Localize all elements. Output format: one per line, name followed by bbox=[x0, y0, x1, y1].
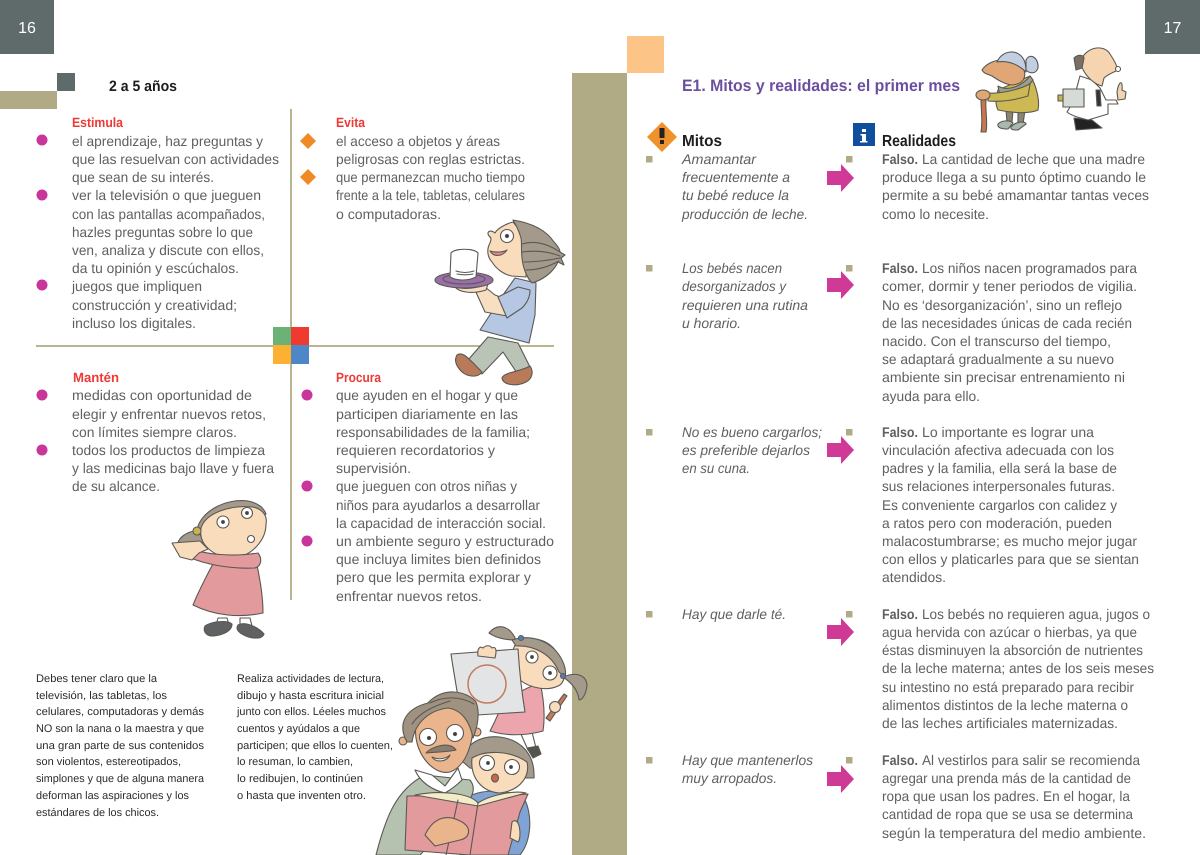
right pigtail bbox=[563, 674, 587, 700]
reality 4: de la leche materna; antes de los seis meses bbox=[882, 660, 1154, 676]
bullets bbox=[36, 134, 48, 290]
hand bbox=[976, 90, 990, 100]
list text: que las resuelvan con actividades bbox=[72, 151, 279, 167]
bullets bbox=[302, 390, 312, 546]
shirt bbox=[480, 278, 536, 343]
reality 4: agua hervida con azúcar o hierbas, ya que bbox=[882, 624, 1137, 640]
reality 5: agregar una prenda más de la cantidad de bbox=[882, 770, 1131, 786]
father head bbox=[415, 695, 473, 772]
illustration: grandmother bbox=[976, 52, 1039, 132]
illustration: father reading with children bbox=[376, 627, 587, 855]
reality 3: a ratos pero con moderación, pueden bbox=[882, 515, 1112, 531]
sleeve bbox=[498, 287, 530, 318]
list text: con límites siempre claros. bbox=[72, 424, 237, 440]
list text bbox=[71, 133, 279, 331]
page number 16: 16 bbox=[18, 20, 36, 37]
myths text bbox=[681, 151, 822, 786]
panel: evita bbox=[300, 115, 525, 222]
column heading: mitos: Mitos bbox=[682, 133, 722, 150]
list text: incluso los digitales. bbox=[72, 315, 196, 331]
list text: peligrosas con reglas estrictas. bbox=[336, 151, 525, 167]
pencil and hand bbox=[546, 694, 567, 721]
ponytail bbox=[178, 530, 206, 548]
note: pantallas: Debes tener claro que la bbox=[36, 673, 158, 685]
note: pantallas: NO son la nana o la maestra y que bbox=[36, 723, 204, 735]
reality 2: comer, dormir y tener periodos de vigilia. bbox=[882, 278, 1137, 294]
list text bbox=[336, 133, 525, 222]
illustration: girl in pink dress bbox=[172, 501, 266, 638]
father torso bbox=[376, 775, 473, 855]
list text: y las medicinas bajo llave y fuera bbox=[72, 460, 274, 476]
reality 1: produce llega a su punto óptimo cuando le bbox=[882, 169, 1146, 185]
reality 5: ropa que usan los padres. En el hogar, la bbox=[882, 788, 1130, 804]
list text: juegos que impliquen bbox=[71, 278, 202, 294]
pink arrows bbox=[827, 164, 854, 793]
reality 3 bbox=[882, 424, 1139, 585]
myths text: producción de leche. bbox=[681, 206, 808, 222]
glass bbox=[450, 249, 478, 280]
reality 5 bbox=[882, 752, 1146, 841]
note: pantallas: deforman las aspiraciones y los bbox=[36, 790, 189, 802]
diamond bullets bbox=[300, 133, 316, 185]
note: pantallas bbox=[36, 673, 205, 819]
bullets bbox=[36, 390, 48, 456]
reality 3: Falso. bbox=[882, 424, 918, 440]
list text: con las pantallas acompañados, bbox=[72, 206, 265, 222]
olive central column bbox=[572, 73, 627, 855]
list text: un ambiente seguro y estructurado bbox=[336, 533, 554, 549]
small square bullets bbox=[646, 156, 852, 764]
myths text: Los bebés nacen bbox=[682, 260, 782, 276]
coat bbox=[1067, 76, 1118, 120]
illustration: doctor bbox=[1058, 48, 1126, 130]
reality 3: vinculación afectiva adecuada con los bbox=[882, 442, 1114, 458]
boy shirt bbox=[460, 791, 530, 855]
list text: supervisión. bbox=[336, 460, 411, 476]
reality 3: padres y la familia, ella será la base de bbox=[882, 460, 1117, 476]
dress bbox=[193, 560, 263, 616]
heading: estimula: Estimula bbox=[72, 115, 123, 130]
boy head bbox=[472, 752, 528, 793]
reality 5: Al vestirlos para salir se recomienda bbox=[922, 752, 1140, 768]
myths text: No es bueno cargarlos; bbox=[682, 424, 822, 440]
heading: 2 a 5 años: 2 a 5 años bbox=[109, 78, 177, 95]
myths text: muy arropados. bbox=[682, 770, 777, 786]
ears bbox=[473, 728, 481, 736]
hair bbox=[1074, 55, 1084, 70]
boy hair bbox=[463, 737, 534, 778]
myths text: desorganizados y bbox=[682, 278, 787, 294]
list text: da tu opinión y escúchalos. bbox=[72, 260, 239, 276]
myths text: frecuentemente a bbox=[682, 169, 790, 185]
socks bbox=[216, 618, 229, 625]
note: lectura: cuentos y ayúdalos a que bbox=[237, 723, 360, 735]
list text: ver la televisión o que jueguen bbox=[72, 187, 261, 203]
girl hair bbox=[512, 638, 566, 677]
page number 17: 17 bbox=[1164, 20, 1182, 37]
list text: ven, analiza y discute con ellos, bbox=[72, 242, 264, 258]
peach square bbox=[627, 36, 664, 73]
father hand bbox=[425, 818, 469, 846]
note: lectura: lo resuman, lo cambien, bbox=[237, 756, 353, 768]
hair tie bbox=[193, 527, 201, 535]
list text: o computadoras. bbox=[336, 206, 441, 222]
reality 4: de las leches artificiales maternizadas. bbox=[882, 715, 1118, 731]
head bbox=[1080, 48, 1118, 86]
head bbox=[201, 507, 266, 558]
note: pantallas: son violentos, estereotipados, bbox=[36, 756, 181, 768]
note: pantallas: estándares de los chicos. bbox=[36, 807, 159, 819]
reality 1: Falso. bbox=[882, 151, 918, 167]
moustache bbox=[426, 745, 456, 753]
reality 3: con ellos y platicarles para que se sientan bbox=[882, 551, 1139, 567]
note: pantallas: simplones y que de alguna manera bbox=[36, 773, 205, 785]
hand under tray bbox=[455, 284, 488, 292]
list text: pero que les permita explorar y bbox=[336, 569, 531, 585]
myths text: Amamantar bbox=[681, 151, 757, 167]
myths text: tu bebé reduce la bbox=[682, 187, 789, 203]
list text: elegir y enfrentar nuevos retos, bbox=[72, 406, 266, 422]
list text: la capacidad de interacción social. bbox=[336, 515, 546, 531]
myths text: en su cuna. bbox=[682, 460, 750, 476]
reality 5: cantidad de ropa que se usa se determina bbox=[882, 806, 1133, 822]
reality 3: sus relaciones interpersonales futuras. bbox=[882, 478, 1115, 494]
reality 2: se adaptará gradualmente a su nuevo bbox=[882, 351, 1114, 367]
reality 4 bbox=[882, 606, 1154, 731]
reality 4: alimentos distintos de la leche materna o bbox=[882, 697, 1128, 713]
reality 2: ayuda para ello. bbox=[882, 388, 980, 404]
heading: procura: Procura bbox=[336, 370, 381, 385]
mouth bbox=[490, 250, 507, 255]
note: pantallas: televisión, las tabletas, los bbox=[36, 690, 168, 702]
tray bbox=[435, 272, 493, 288]
panel: mantén bbox=[36, 370, 274, 494]
page number 17 bbox=[1145, 0, 1200, 54]
legs bbox=[1006, 110, 1013, 122]
thumb hand bbox=[1117, 83, 1126, 100]
reality 2: nacido. Con el transcurso del tiempo, bbox=[882, 333, 1111, 349]
panel: procura bbox=[302, 370, 554, 604]
shoes bbox=[998, 121, 1013, 129]
clipboard bbox=[1063, 89, 1084, 107]
note: pantallas: una gran parte de sus contenidos bbox=[36, 740, 205, 752]
reality 1: La cantidad de leche que una madre bbox=[922, 151, 1145, 167]
head bbox=[488, 222, 528, 277]
reality 4: Los bebés no requieren agua, jugos o bbox=[922, 606, 1150, 622]
reality 4: éstas disminuyen la absorción de nutrientes bbox=[882, 642, 1143, 658]
list text: participen diariamente en las bbox=[336, 406, 518, 422]
cane bbox=[981, 100, 987, 132]
reality 2 bbox=[882, 260, 1137, 404]
reality 1: permite a su bebé amamantar tantas veces bbox=[882, 187, 1149, 203]
girl head bbox=[512, 639, 564, 689]
reality 1: como lo necesite. bbox=[882, 206, 989, 222]
open book bbox=[405, 794, 528, 855]
father eyes bbox=[420, 728, 436, 746]
arm bbox=[475, 287, 507, 316]
quadrant cross lines bbox=[36, 109, 554, 600]
note: lectura: participen; que ellos lo cuenten, bbox=[237, 740, 393, 752]
list text: el acceso a objetos y áreas bbox=[336, 133, 500, 149]
girl legs and shoe bbox=[520, 732, 536, 750]
list text: de su alcance. bbox=[72, 478, 160, 494]
reality 3: Lo importante es lograr una bbox=[922, 424, 1094, 440]
arm bbox=[185, 547, 261, 568]
decorative header blocks left bbox=[0, 73, 75, 109]
ear bbox=[524, 254, 534, 264]
reality 3: Es conveniente cargarlos con calidez y bbox=[882, 497, 1117, 513]
reality 5: según la temperatura del medio ambiente. bbox=[882, 825, 1146, 841]
hair bbox=[513, 220, 565, 283]
list text: que incluya limites bien definidos bbox=[336, 551, 541, 567]
hair bbox=[197, 501, 266, 550]
hair bbox=[997, 52, 1026, 72]
illustration: child carrying tray bbox=[435, 220, 565, 385]
list text: medidas con oportunidad de bbox=[72, 387, 252, 403]
collar bbox=[415, 768, 462, 793]
myths text: requieren una rutina bbox=[682, 297, 808, 313]
face bbox=[982, 60, 1025, 85]
list text: enfrentar nuevos retos. bbox=[336, 588, 482, 604]
heading: evita: Evita bbox=[336, 115, 365, 130]
reality 1 bbox=[882, 151, 1149, 222]
hands bbox=[172, 541, 208, 560]
shoes bbox=[204, 622, 232, 636]
list text: que sean de su interés. bbox=[72, 169, 214, 185]
page number 16 bbox=[0, 0, 54, 54]
list text: todos los productos de limpieza bbox=[72, 442, 265, 458]
icon: info square bbox=[853, 123, 875, 146]
note: pantallas: celulares, computadoras y demás bbox=[36, 706, 205, 718]
myths text: Hay que darle té. bbox=[682, 606, 786, 622]
collar bbox=[998, 76, 1033, 93]
reality 2: de las necesidades únicas de cada recién bbox=[882, 315, 1132, 331]
note: lectura: o hasta que inventen otro. bbox=[237, 790, 366, 802]
note: lectura: dibujo y hasta escritura inicial bbox=[237, 690, 384, 702]
note: lectura: lo redibujen, lo continúen bbox=[237, 773, 363, 785]
reality 3: malacostumbrarse; es mucho mejor jugar bbox=[882, 533, 1137, 549]
reality 4: su intestino no está preparado para recibir bbox=[882, 679, 1134, 695]
eye bbox=[500, 230, 514, 242]
girl dress bbox=[490, 682, 544, 735]
colour squares at centre bbox=[273, 327, 309, 364]
list text: requieren recordatorios y bbox=[336, 442, 495, 458]
note: lectura: Realiza actividades de lectura, bbox=[237, 673, 384, 685]
myths text: es preferible dejarlos bbox=[682, 442, 810, 458]
reality 2: Los niños nacen programados para bbox=[922, 260, 1137, 276]
sleeve bbox=[988, 84, 1030, 101]
reality 2: ambiente sin precisar entrenamiento ni bbox=[882, 369, 1125, 385]
list text: que jueguen con otros niñas y bbox=[336, 478, 517, 494]
reality 2: Falso. bbox=[882, 260, 918, 276]
list text bbox=[336, 387, 554, 604]
list text bbox=[72, 387, 274, 494]
dress bbox=[996, 76, 1039, 113]
father hair bbox=[403, 692, 478, 742]
ear bbox=[1116, 66, 1120, 72]
list text: construcción y creatividad; bbox=[72, 297, 237, 313]
left pigtail bbox=[489, 627, 516, 640]
pants bbox=[468, 337, 530, 374]
list text: el aprendizaje, haz preguntas y bbox=[72, 133, 263, 149]
note: lectura: junto con ellos. Léeles muchos bbox=[236, 706, 386, 718]
title: E1. Mitos y realidades: el primer mes bbox=[682, 77, 960, 95]
myths text: Hay que mantenerlos bbox=[682, 752, 813, 768]
bun bbox=[1026, 56, 1038, 73]
icon: warning diamond bbox=[647, 122, 677, 152]
list text: que permanezcan mucho tiempo bbox=[336, 169, 525, 185]
shoes bbox=[456, 354, 482, 376]
list text: hazles preguntas sobre lo que bbox=[72, 224, 253, 240]
myths text: u horario. bbox=[682, 315, 741, 331]
list text: responsabilidades de la familia; bbox=[336, 424, 530, 440]
panel: estimula bbox=[36, 115, 279, 331]
list text: frente a la tele, tabletas, celulares bbox=[336, 187, 525, 203]
note: lectura bbox=[236, 673, 393, 802]
reality 4: Falso. bbox=[882, 606, 918, 622]
drawing sheet bbox=[451, 649, 525, 716]
heading: mantén: Mantén bbox=[73, 370, 119, 385]
tie bbox=[1096, 90, 1101, 106]
column heading: realidades: Realidades bbox=[882, 133, 956, 150]
reality 2: No es ‘desorganización’, sino un reflejo bbox=[882, 297, 1122, 313]
trousers bbox=[1074, 118, 1102, 130]
list text: que ayuden en el hogar y que bbox=[336, 387, 518, 403]
reality 5: Falso. bbox=[882, 752, 918, 768]
list text: niños para ayudarlos a desarrollar bbox=[336, 497, 540, 513]
reality 3: atendidos. bbox=[882, 569, 946, 585]
